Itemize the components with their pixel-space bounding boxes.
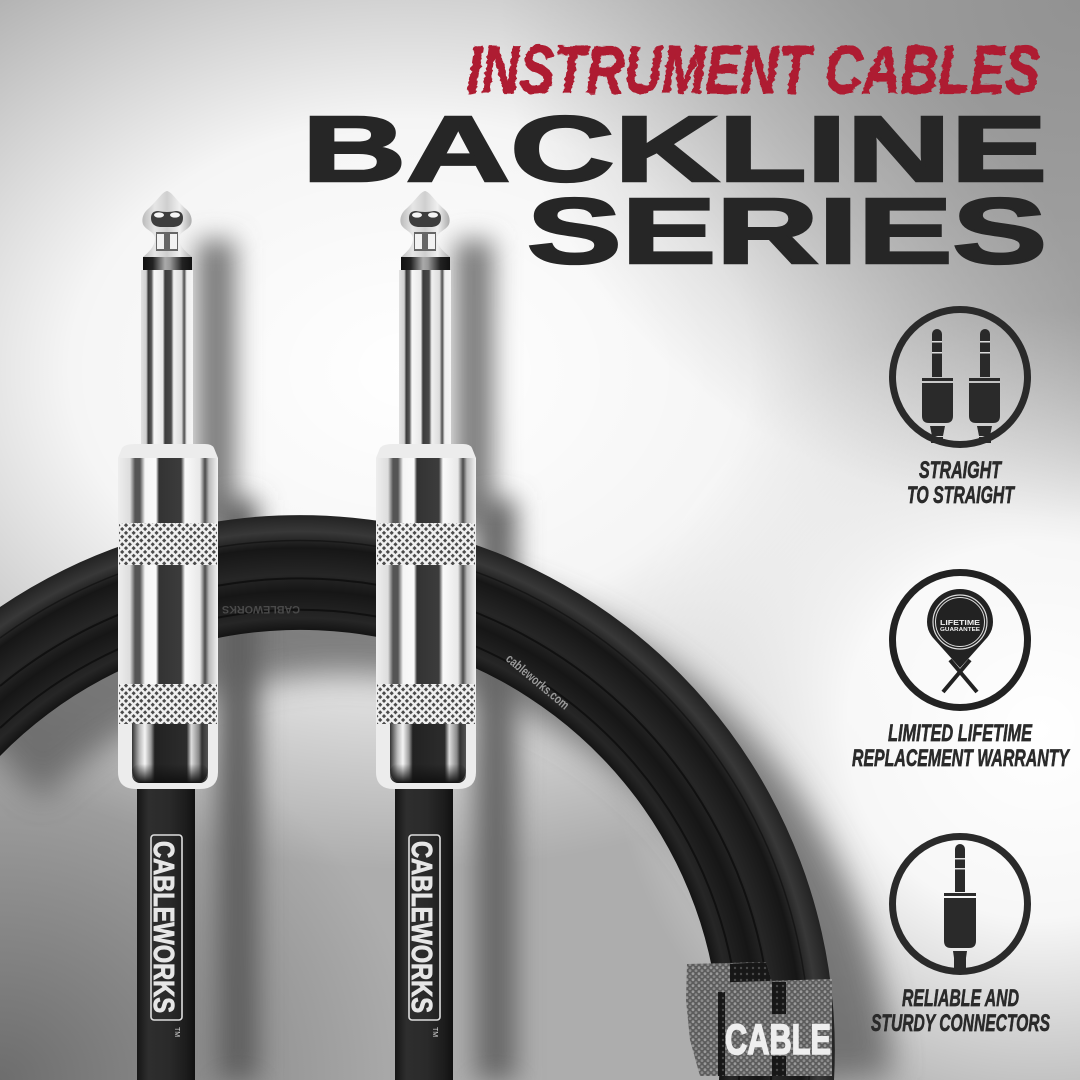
cable print: cableworks.com: cableworks.com	[503, 651, 572, 712]
icon: single plug	[892, 836, 1028, 972]
connector: left plug with cable	[118, 191, 218, 1080]
title: Backline: BACKLINE	[302, 97, 1047, 201]
label: reliable and sturdy connectors	[871, 985, 1050, 1037]
icon: lifetime guarantee: LIFETIME	[940, 618, 980, 627]
label: reliable and sturdy connectors: RELIABLE AND	[902, 985, 1019, 1012]
logo: CABLEWORKS left: CABLEWORKS	[147, 841, 179, 1013]
cable print: faint mark: CABLEWORKS	[222, 603, 300, 615]
label: straight to straight	[907, 457, 1016, 509]
logo: CABLEWORKS right: TM	[431, 1027, 438, 1037]
title: Series: SERIES	[527, 179, 1047, 283]
label: straight to straight: TO STRAIGHT	[907, 482, 1016, 509]
label: limited lifetime warranty	[852, 720, 1070, 772]
label: straight to straight: STRAIGHT	[919, 457, 1003, 484]
coiled black cable	[0, 515, 835, 1080]
cable strap: CABLE	[725, 1016, 831, 1064]
logo: CABLEWORKS left: TM	[173, 1027, 180, 1037]
connector: right plug with cable	[376, 191, 476, 1080]
cast shadows	[0, 240, 834, 1080]
icon: lifetime guarantee: GUARANTEE	[940, 627, 980, 633]
icon: two straight plugs	[892, 310, 1028, 444]
cable strap	[686, 962, 832, 1076]
icon: lifetime guarantee	[892, 572, 1028, 708]
logo: CABLEWORKS right: CABLEWORKS	[405, 841, 437, 1013]
